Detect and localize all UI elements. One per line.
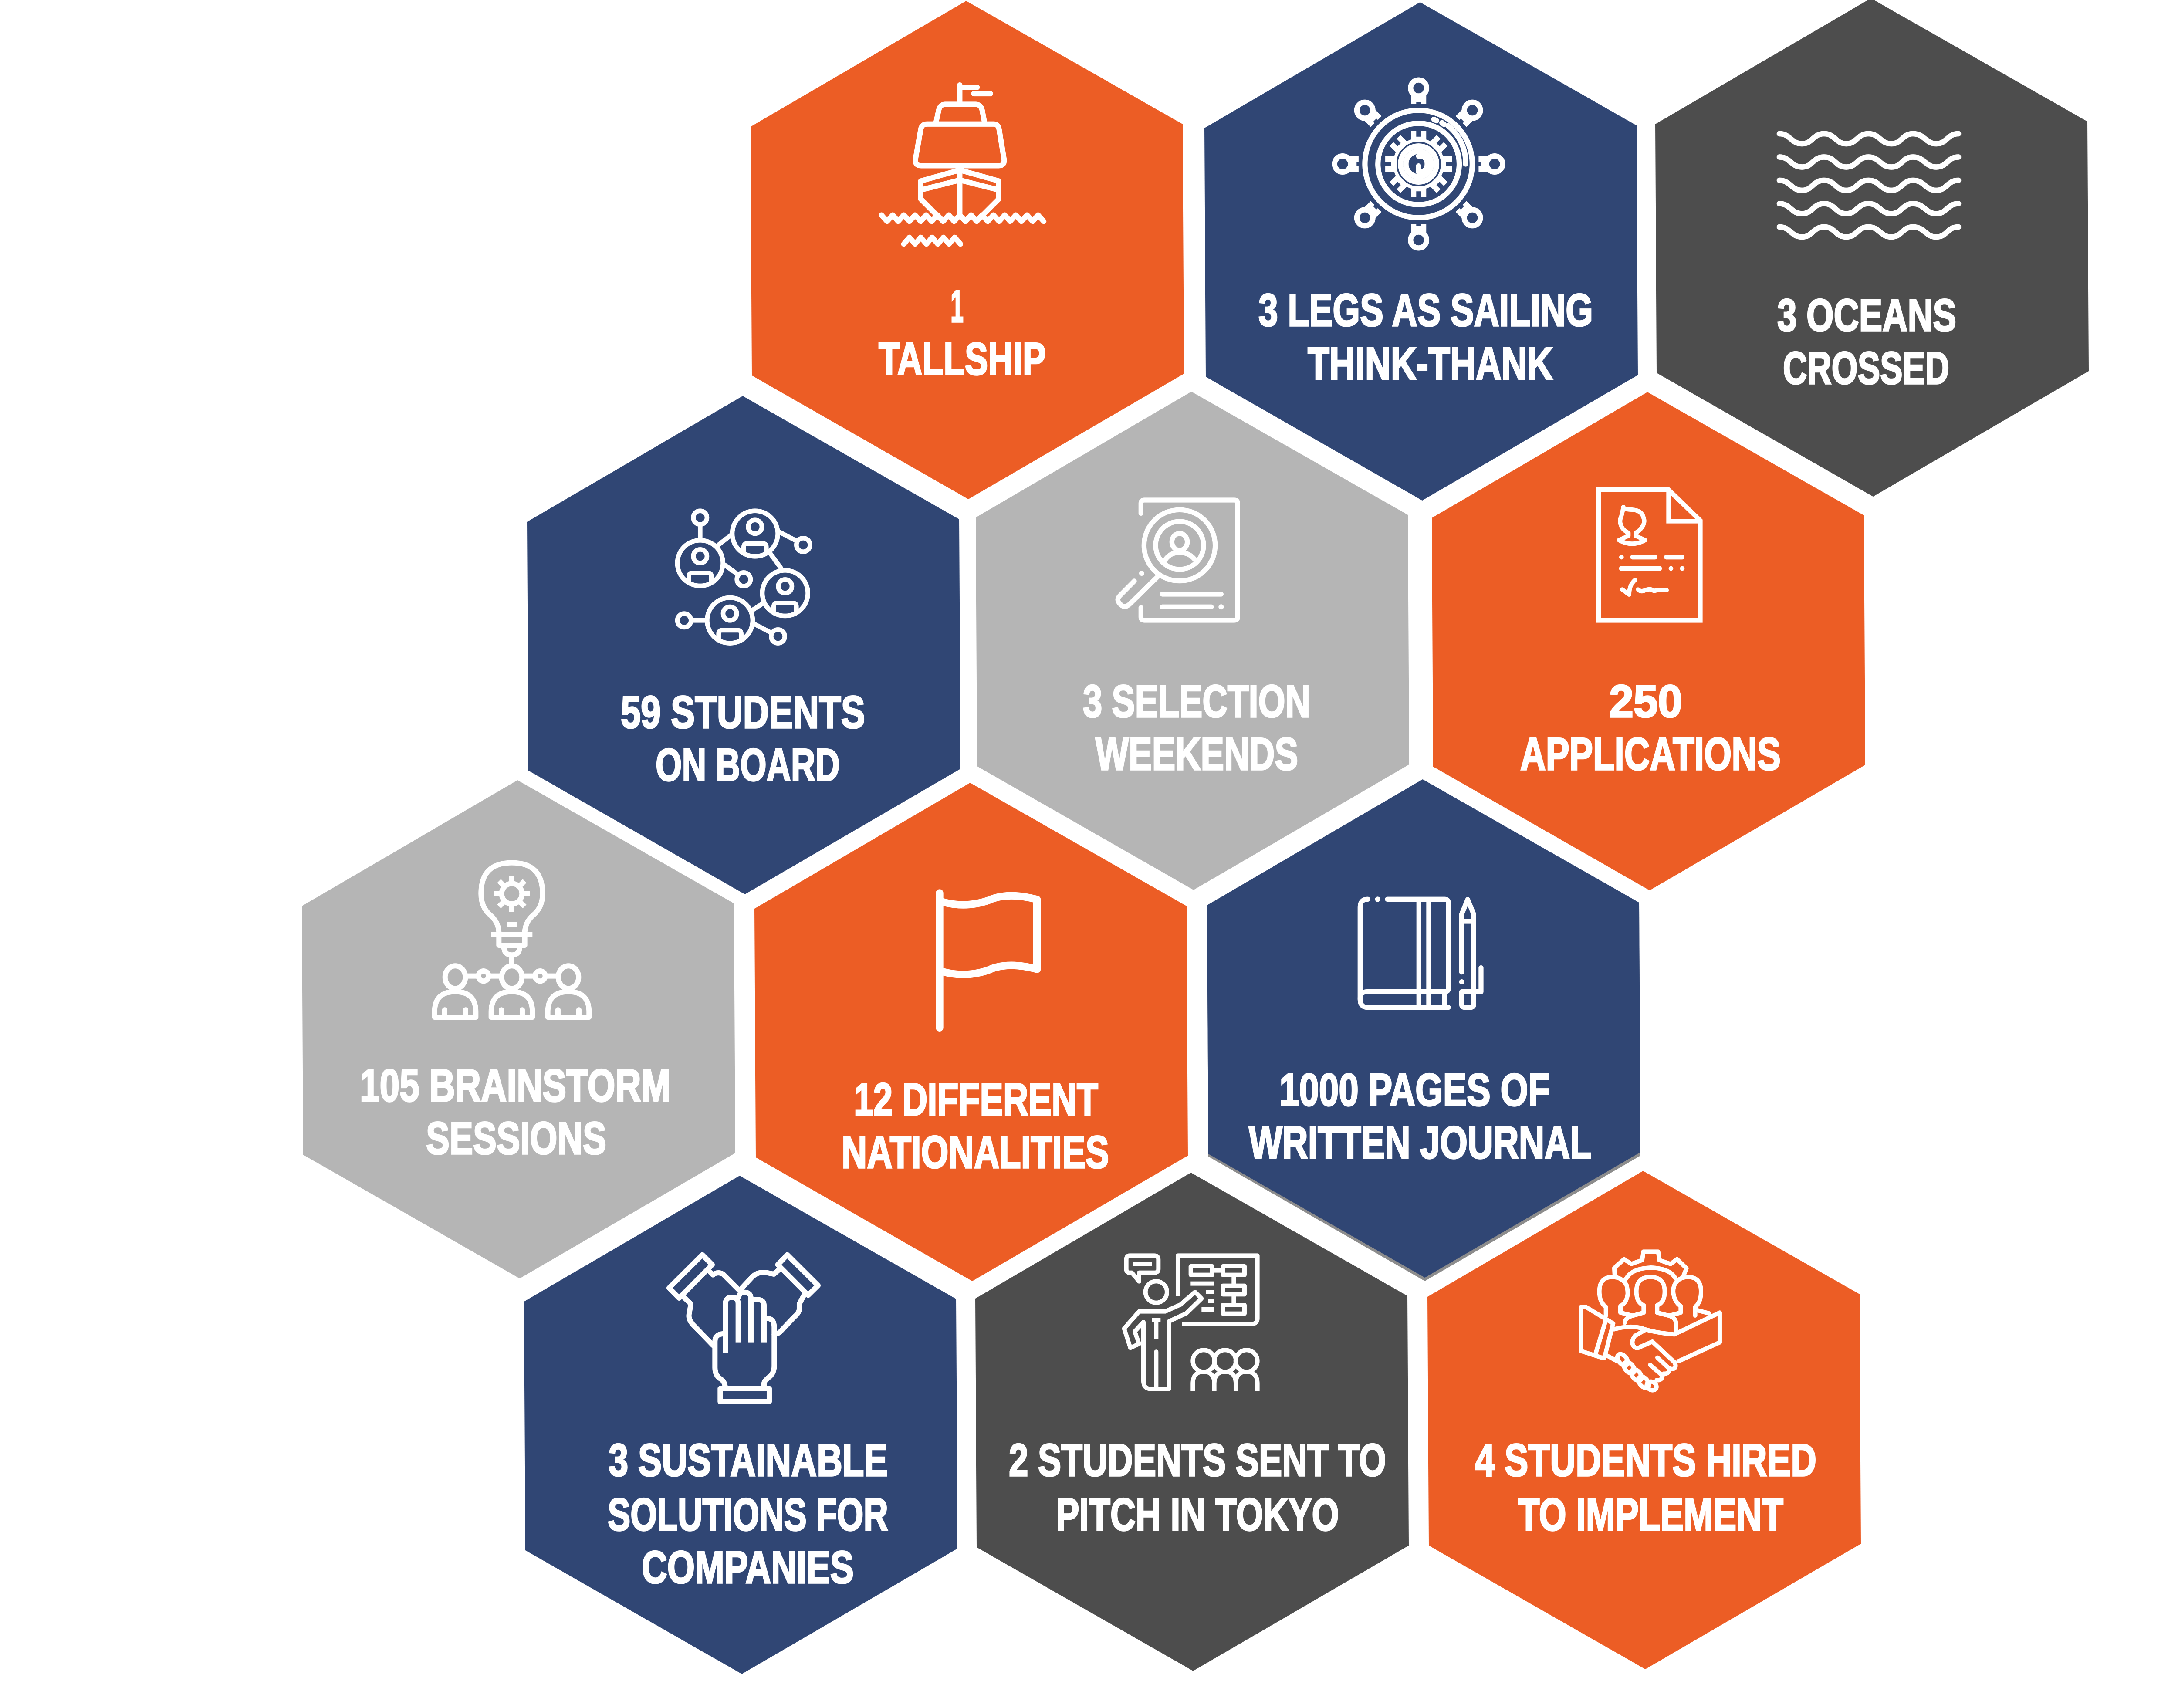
panel: 2 students sent to pitch in Tokyo — [975, 1173, 1409, 1671]
icon: flag — [940, 893, 1037, 1028]
icon: notebook and pencil — [1360, 896, 1481, 1008]
label: 3 selection weekends: 3 SELECTION — [1083, 676, 1310, 727]
label: 3 sustainable solutions for companies: COMPANIES — [642, 1542, 854, 1593]
label: 3 oceans crossed: CROSSED — [1783, 343, 1949, 394]
label: 3 sustainable solutions for companies: 3 SUSTAINABLE — [609, 1435, 888, 1486]
hexagon background: students — [527, 396, 960, 894]
label: 3 selection weekends — [1083, 676, 1310, 780]
hexagon background: nationalities — [754, 783, 1188, 1281]
hexagon background: solutions — [524, 1176, 957, 1674]
icon: magnifier over profile document — [1118, 500, 1238, 620]
hexagon background: journal — [1207, 779, 1640, 1278]
label: 3 legs as sailing think-thank: 3 LEGS AS SAILING — [1258, 285, 1593, 336]
label: 3 legs as sailing think-thank — [1258, 285, 1593, 389]
label: 105 brainstorm sessions: SESSIONS — [426, 1113, 606, 1164]
panel: 3 legs as sailing think-thank — [1204, 2, 1638, 501]
panel: 1000 pages of written journal — [1207, 779, 1640, 1281]
label: 1 tallship — [879, 281, 1046, 385]
label: 2 students sent to pitch in Tokyo: PITCH IN TOKYO — [1056, 1489, 1339, 1540]
label: 2 students sent to pitch in Tokyo — [1009, 1435, 1386, 1540]
icon: CV document — [1599, 490, 1700, 620]
label: 12 different nationalities: 12 DIFFERENT — [854, 1074, 1098, 1125]
icon: tall ship — [881, 85, 1044, 244]
hexagon shadow: journal — [1207, 905, 1640, 1281]
icon: presenter at board with audience — [1124, 1255, 1258, 1391]
icon: handshake, team and gear — [1581, 1251, 1720, 1392]
label: 59 students on board — [621, 687, 865, 791]
panel: 3 selection weekends — [976, 392, 1409, 890]
label: 1 tallship: 1 — [950, 281, 964, 332]
icon: ocean waves — [1779, 134, 1958, 237]
panel: 59 students on board — [527, 396, 960, 894]
label: 4 students hired to implement: 4 STUDENTS HIRED — [1475, 1435, 1816, 1486]
label: 250 applications: 250 — [1609, 676, 1682, 727]
hexagon background: selection — [976, 392, 1409, 890]
label: 2 students sent to pitch in Tokyo: 2 STUDENTS SENT TO — [1009, 1435, 1386, 1486]
icon: connected people network — [677, 511, 810, 643]
panel: 1 tallship — [751, 1, 1184, 499]
panel: 4 students hired to implement — [1427, 1171, 1861, 1669]
icon: light bulb above team — [435, 863, 589, 1017]
hexagon background: brainstorm — [302, 780, 735, 1278]
label: 3 oceans crossed: 3 OCEANS — [1777, 290, 1956, 341]
icon: three joined hands — [669, 1255, 818, 1402]
hexagon background: pitch — [975, 1173, 1409, 1671]
label: 59 students on board: ON BOARD — [656, 740, 840, 791]
label: 3 sustainable solutions for companies — [608, 1435, 888, 1593]
panel: 3 sustainable solutions for companies — [524, 1176, 957, 1674]
label: 3 sustainable solutions for companies: SOLUTIONS FOR — [608, 1489, 888, 1540]
hexagon background: oceans — [1655, 0, 2089, 497]
label: 1000 pages of written journal: 1000 PAGES OF — [1279, 1065, 1550, 1116]
label: 105 brainstorm sessions: 105 BRAINSTORM — [360, 1060, 671, 1111]
label: 4 students hired to implement — [1475, 1435, 1816, 1540]
panel: 105 brainstorm sessions — [302, 780, 735, 1278]
label: 59 students on board: 59 STUDENTS — [621, 687, 865, 738]
panel: 12 different nationalities — [754, 783, 1188, 1281]
hexagon background: sailing legs — [1204, 2, 1638, 501]
label: 1000 pages of written journal: WRITTEN JOURNAL — [1249, 1117, 1592, 1168]
hexagon background: tallship — [751, 1, 1184, 499]
label: 4 students hired to implement: TO IMPLEMENT — [1518, 1489, 1783, 1540]
panel: 3 oceans crossed — [1655, 0, 2089, 497]
label: 250 applications — [1520, 676, 1781, 780]
label: 12 different nationalities — [842, 1074, 1109, 1178]
icon: ship wheel — [1335, 80, 1502, 248]
label: 1 tallship: TALLSHIP — [879, 334, 1046, 385]
hexagon background: hired — [1427, 1171, 1861, 1669]
label: 3 legs as sailing think-thank: THINK-THANK — [1308, 338, 1553, 389]
label: 250 applications: APPLICATIONS — [1520, 729, 1781, 780]
panel: 250 applications — [1432, 392, 1865, 890]
hexagon background: applications — [1432, 392, 1865, 890]
label: 3 oceans crossed — [1777, 290, 1956, 394]
label: 1000 pages of written journal — [1249, 1065, 1592, 1168]
label: 105 brainstorm sessions — [360, 1060, 671, 1164]
label: 3 selection weekends: WEEKENDS — [1096, 729, 1298, 780]
label: 12 different nationalities: NATIONALITIES — [842, 1127, 1109, 1178]
